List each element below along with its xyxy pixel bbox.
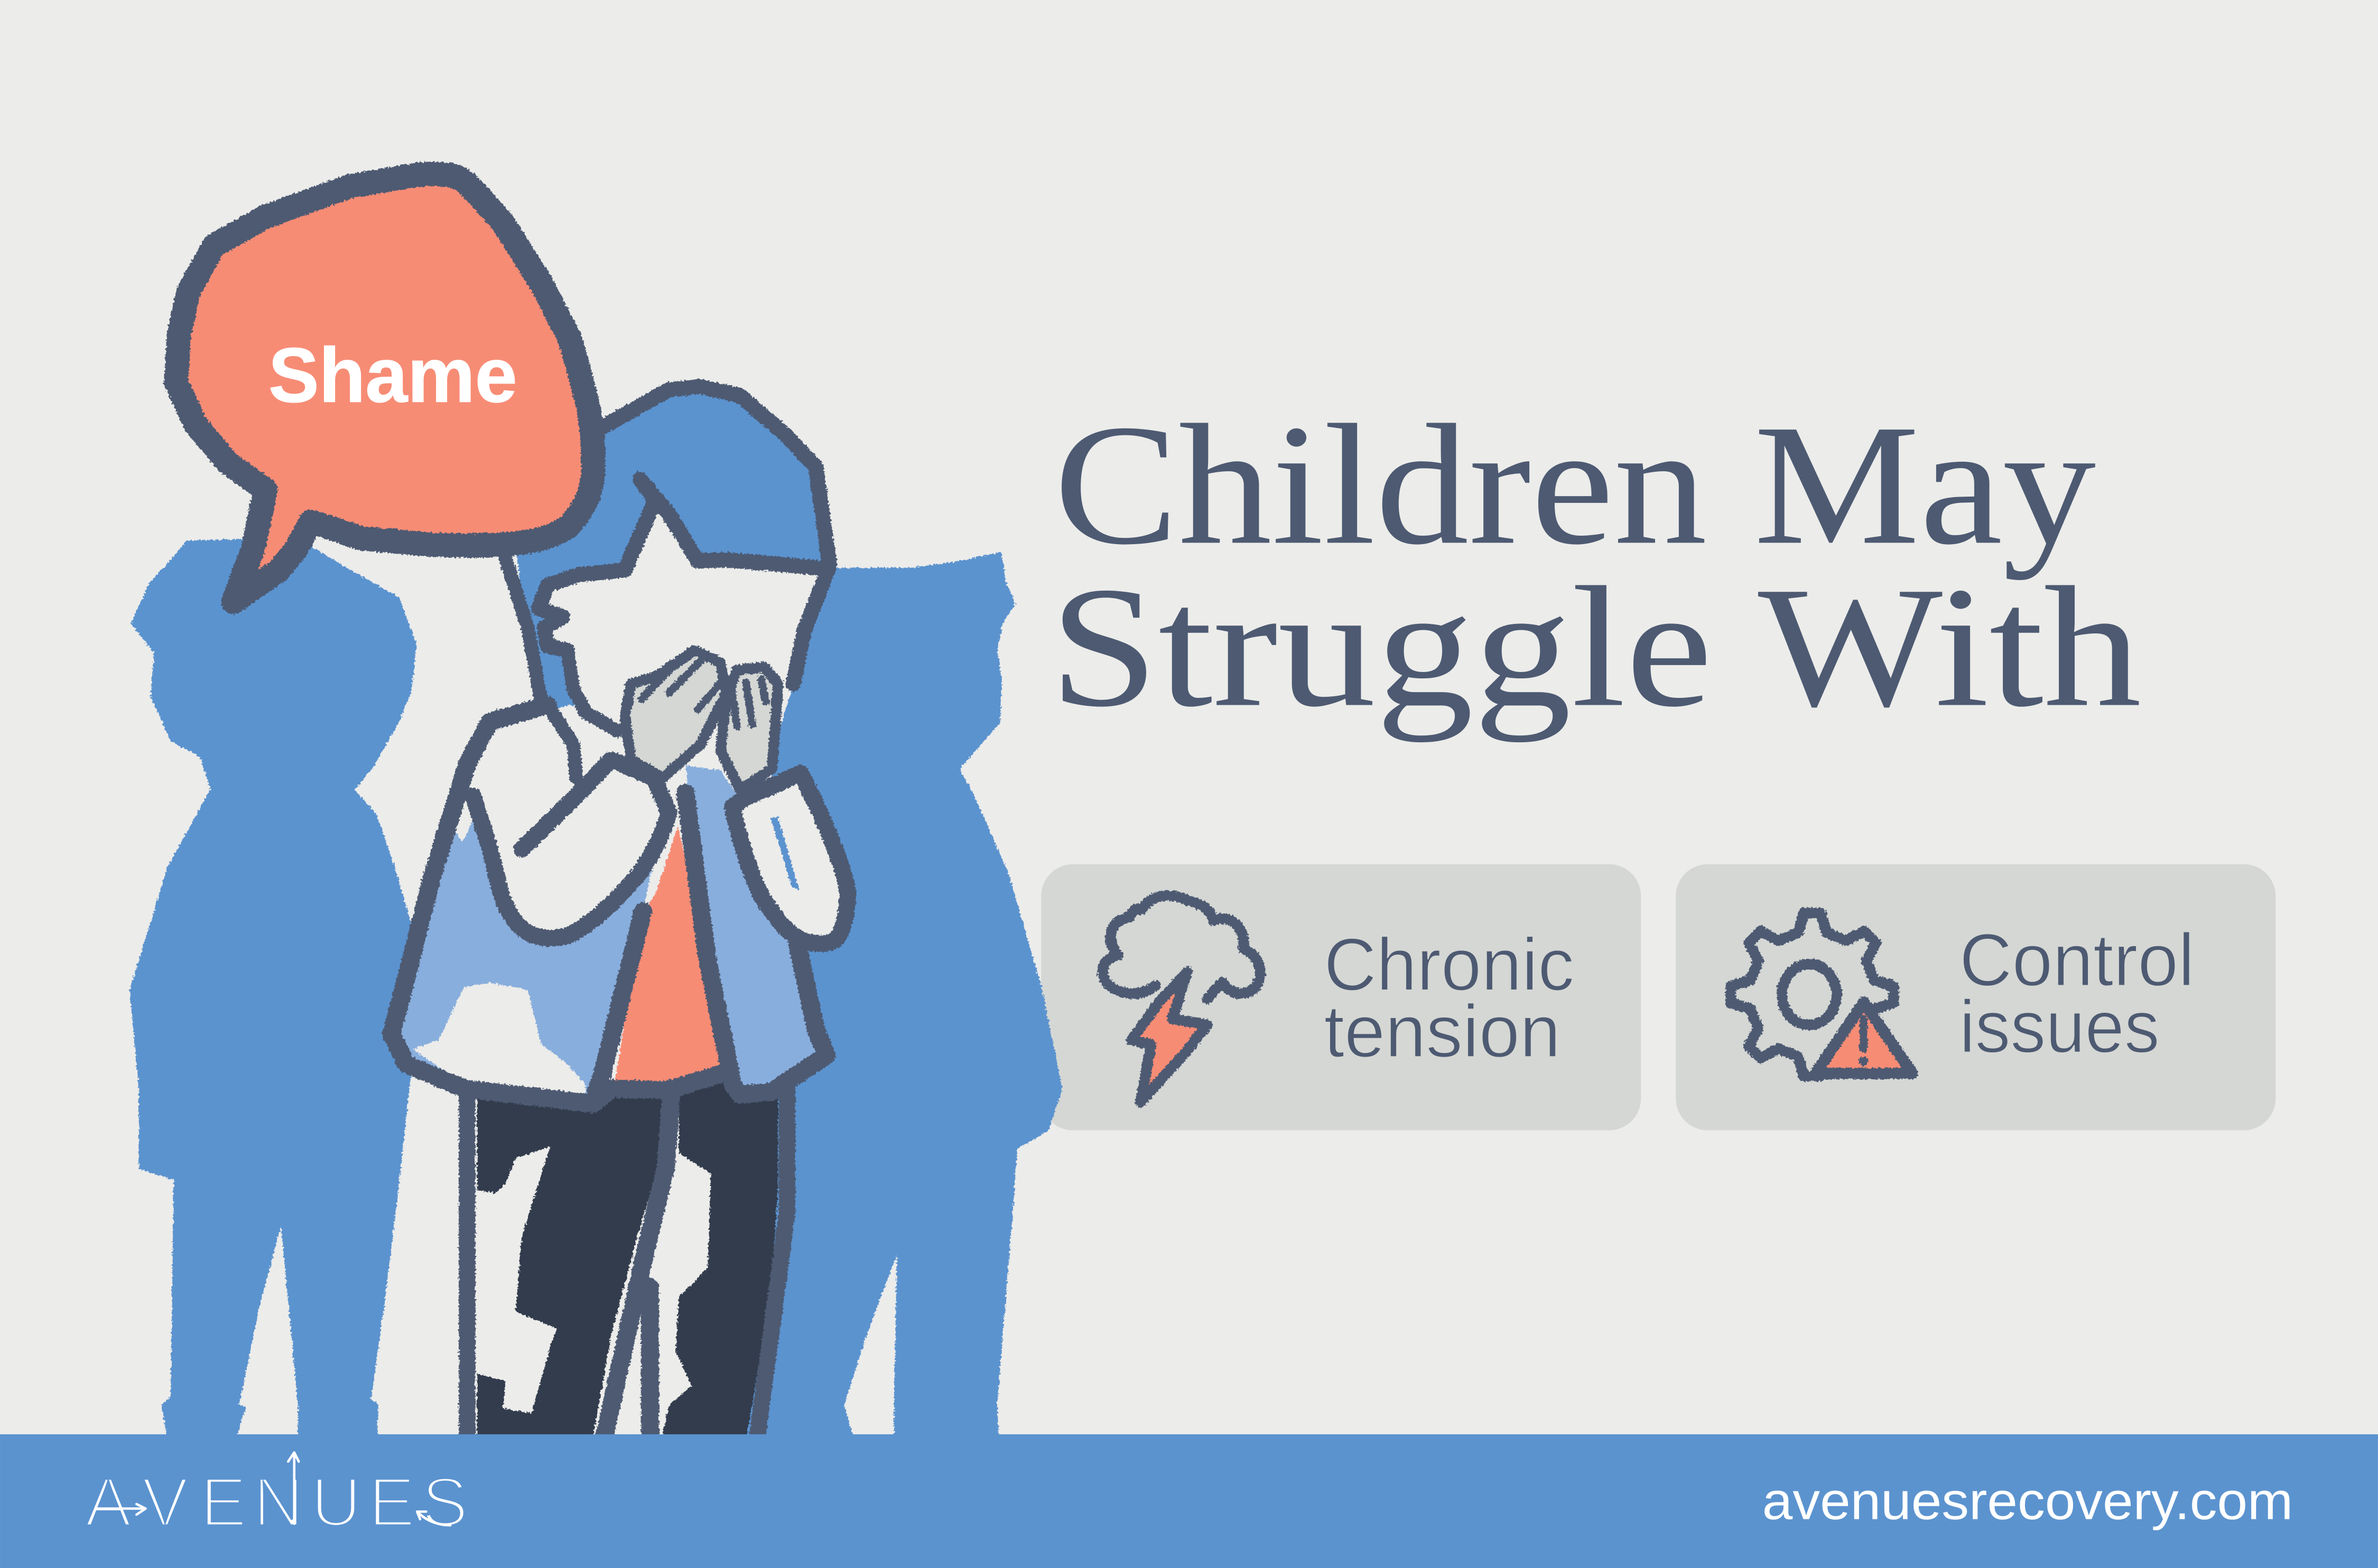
left coat panel (391, 764, 669, 1104)
website address: avenuesrecovery.com (1762, 1472, 2293, 1531)
label: control issues (1959, 918, 2195, 1068)
card: chronic tension (1041, 864, 1641, 1130)
coat outlines (391, 705, 826, 1104)
logo wordmark: AVENUES (85, 1463, 468, 1541)
label: chronic tension (1324, 923, 1574, 1072)
right shadow figure (743, 555, 1060, 1440)
logo: Avenues (85, 1452, 468, 1541)
card: control issues (1676, 864, 2275, 1130)
right hand (720, 667, 778, 790)
hair and face outline (538, 387, 830, 684)
label: chronic tension: tension (1324, 990, 1560, 1072)
shirt (614, 826, 732, 1086)
label: chronic tension: Chronic (1324, 923, 1574, 1006)
left hand (625, 650, 727, 778)
neck and collar lines (504, 552, 617, 778)
speech bubble (176, 174, 593, 602)
right coat panel (685, 766, 826, 1095)
label: control issues: Control (1959, 918, 2195, 1001)
title: Struggle With (1049, 550, 2141, 743)
sleeve blue streak (770, 817, 799, 890)
footer band (0, 1434, 2378, 1568)
label: control issues: issues (1959, 985, 2160, 1068)
hair (516, 387, 830, 713)
left shadow figure (132, 542, 414, 1440)
title (1049, 388, 2141, 743)
illustration: group of figures (132, 174, 1060, 1440)
icon: storm cloud with lightning (1103, 895, 1260, 1102)
face (538, 479, 822, 773)
left sleeve outline (473, 760, 669, 938)
left sleeve (450, 705, 669, 938)
trousers (467, 1077, 787, 1440)
left coat highlight patch (413, 983, 586, 1098)
icon: gear with warning triangle (1731, 913, 1912, 1076)
title: Children May (1054, 388, 2096, 581)
logo arrows (97, 1452, 450, 1525)
right sleeve (732, 773, 848, 944)
bubble word: Shame: Shame (268, 333, 517, 419)
child figure (391, 387, 848, 1440)
